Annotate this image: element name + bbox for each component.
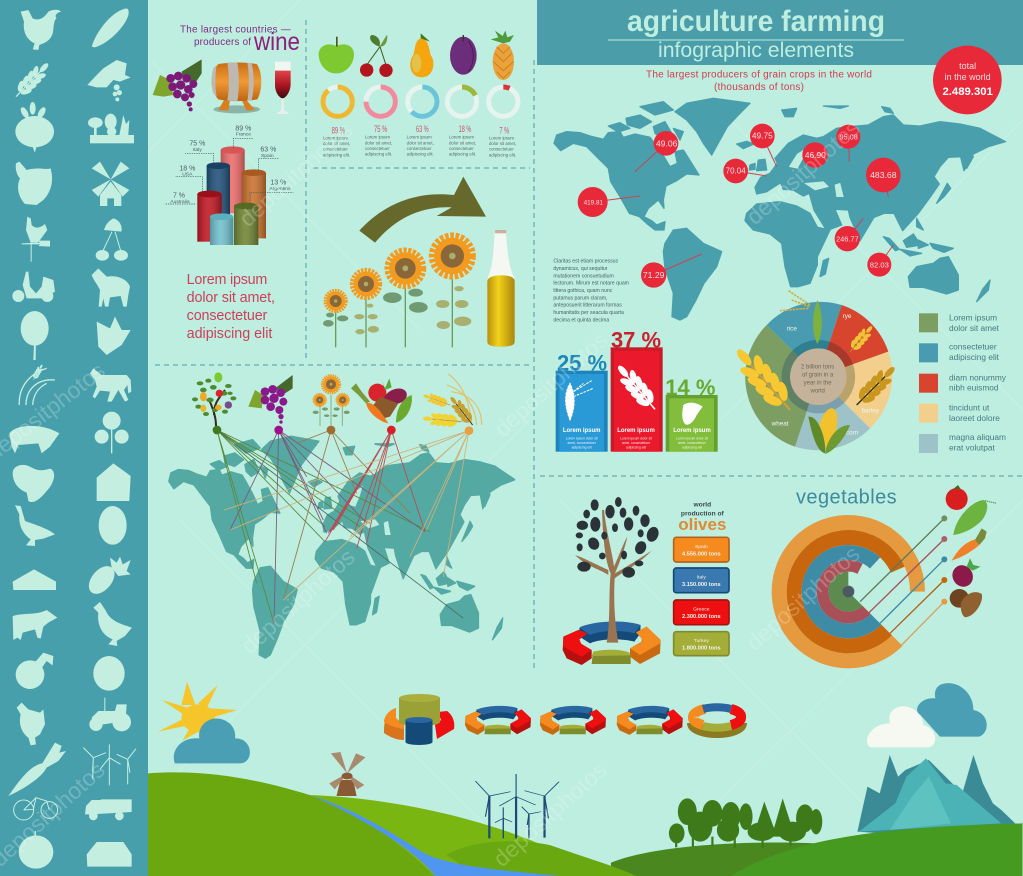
chart: wine cylinders: 75 % (189, 140, 205, 147)
text: ring captions: adipiscing elit. (449, 152, 476, 157)
icon: barrel (212, 62, 261, 113)
legend: olive producers: Greece (693, 607, 710, 613)
chart: producer bubbles: 419.81 (584, 199, 603, 206)
icon: beet (949, 558, 981, 591)
chart: producer bubbles: 95.08 (839, 132, 858, 141)
ring stage 2 (465, 706, 531, 735)
text: ring captions: Lorem ipsum (365, 135, 390, 140)
chart: percentage rings (323, 87, 518, 116)
text: claritas paragraph: dynamicus, qui sequitur (553, 266, 608, 272)
bar: 25 percent: amet, consectetuer (568, 441, 597, 445)
chart: wine cylinders: Australia (170, 199, 190, 205)
panel: wine producers (153, 24, 300, 342)
watermark: depositphotos (234, 117, 358, 232)
ring stage 3 (540, 706, 606, 735)
text: ring captions: 7 % (499, 126, 509, 136)
text: claritas paragraph: mutationem consuetudium (553, 273, 614, 279)
chart: wine cylinders: 13 % (270, 180, 286, 187)
icon: rye ear (845, 322, 877, 356)
icon: fruit tree (192, 372, 236, 426)
bar: 14 percent: amet, consectetuer (678, 441, 707, 445)
panel: world trade map (169, 372, 515, 658)
text: ring captions: dolor sit amet, (323, 141, 350, 146)
text: ring captions: adipiscing elit. (365, 152, 392, 157)
bar: 14 percent: Lorem ipsum dolor sit (676, 437, 708, 441)
bar: 37 percent: amet, consectetuer (622, 441, 651, 445)
icon: vegetable heart (351, 378, 412, 423)
legend: olive producers: Spain (695, 544, 708, 550)
chart: producer bubbles: 49.06 (656, 138, 678, 148)
donut slice labels: wheat (771, 420, 789, 427)
text: ring captions: 89 % (332, 126, 345, 136)
bar: 25 percent: Lorem ipsum dolor sit (566, 437, 598, 441)
donut slice labels (771, 313, 880, 437)
icon: tomato (946, 485, 968, 510)
heading: wine (180, 24, 300, 56)
text: lorem callout (187, 272, 275, 342)
text: ring captions: Lorem ipsum (449, 135, 474, 140)
text: claritas paragraph: lectorum. Mirum est notare quam (553, 281, 629, 287)
callout: world total: 2.489.301 (942, 86, 993, 98)
chart: wine cylinders: France (236, 132, 251, 138)
chart: exploded ring stages (384, 694, 741, 745)
text: ring captions: 18 % (459, 124, 471, 134)
chart: wine cylinders: 18 % (179, 166, 195, 173)
bar: 14 percent (665, 375, 718, 452)
legend: olive producers (674, 537, 729, 656)
text: donut center: of grain in a (802, 372, 834, 378)
panel: fruit production rings (319, 31, 518, 157)
ring stage 4 (617, 706, 683, 735)
legend: olive producers: 2.300.000 tons (682, 614, 721, 620)
map: world grain (554, 98, 1006, 320)
legend: grain donut: nibh euismod (949, 382, 999, 392)
callout: world total (933, 46, 1002, 114)
text: donut center (801, 364, 834, 394)
legend: grain donut: dolor sit amet (949, 323, 1000, 333)
bar: 37 percent (610, 327, 663, 452)
chart: producer bubbles: 71.29 (643, 270, 665, 280)
text: ring captions: adipiscing elit. (323, 152, 350, 157)
callout: world total: total (959, 61, 976, 71)
heading: vegetables: vegetables (796, 486, 897, 508)
icon: white cloud (867, 706, 935, 747)
icon: teal cloud right (917, 683, 987, 737)
chart: wine cylinders (165, 125, 293, 245)
icon: corn (808, 406, 850, 454)
heading: grain map (646, 69, 872, 93)
icon: sun (158, 682, 237, 741)
bar: 37 percent: 37 % (611, 327, 661, 352)
heading: olives: olives (678, 515, 726, 534)
text: ring captions (323, 124, 516, 157)
text: ring captions: Lorem ipsum (489, 135, 514, 140)
text: lorem callout: adipiscing elit (187, 326, 272, 342)
legend: grain donut: consectetuer (949, 341, 997, 351)
text: ring captions: consectetuer (489, 147, 514, 152)
icon: rice sprig (780, 291, 822, 344)
icon: grain sheaf (422, 374, 482, 429)
text: ring captions: consectetuer (407, 146, 432, 151)
bar: 37 percent: adipiscing elit (626, 446, 646, 450)
legend: grain donut: magna aliquam (949, 432, 1006, 442)
text: ring captions: consectetuer (449, 146, 474, 151)
bar: 14 percent: Lorem ipsum (673, 428, 711, 434)
chart: leader lines (860, 515, 947, 645)
map: trade routes map (169, 436, 515, 658)
text: ring captions: consectetuer (323, 147, 348, 152)
text: lorem callout: consectetuer (187, 308, 268, 324)
chart: wine cylinders: USA (182, 171, 193, 177)
legend: grain donut: adipiscing elit (949, 352, 1000, 362)
chart: vegetable arcs (779, 522, 917, 661)
legend: olive producers: 4.556.000 tons (682, 551, 721, 557)
chart: wine cylinders: 63 % (260, 147, 276, 154)
text: claritas paragraph: putamus parum claram, (553, 295, 608, 301)
donut slice labels: rice (787, 325, 797, 332)
heading: olives: production of (681, 510, 725, 517)
sunflower plants (323, 236, 472, 347)
icons: lower sidebar silhouettes (8, 463, 136, 869)
icon: potatoes (950, 589, 982, 617)
arrow (359, 177, 486, 243)
ring stage 1 (384, 694, 454, 745)
icon: plum (450, 35, 477, 75)
panel: olives (563, 497, 729, 665)
donut slice labels: corn (846, 430, 859, 437)
panel: icon sidebar (0, 0, 148, 876)
text: lorem callout: dolor sit amet, (187, 290, 275, 306)
text: donut center: world (810, 388, 825, 394)
subtitle: infographic elements (658, 39, 854, 62)
bar: 37 percent: Lorem ipsum (617, 428, 655, 434)
donut slice labels: rye (843, 313, 852, 320)
text: ring captions: dolor sit amet, (449, 140, 476, 145)
chart: wine cylinders: Italy (193, 147, 202, 153)
heading: olives (678, 502, 726, 534)
text: claritas paragraph: Claritas est etiam processus (553, 259, 619, 265)
chart: producer bubbles: 483.68 (870, 170, 897, 180)
legend: grain donut: diam nonummy (949, 372, 1007, 382)
chart: wine cylinders: 89 % (235, 125, 251, 132)
icons: upper sidebar silhouettes (9, 8, 134, 453)
legend: olive producers: 3.150.000 tons (682, 582, 721, 588)
icon: cherries (360, 35, 393, 77)
chart: wine cylinders: Spain (261, 153, 274, 159)
icon: cucumber (953, 500, 997, 535)
text: ring captions: adipiscing elit. (407, 152, 434, 157)
legend: grain donut: laoreet dolore (949, 413, 1000, 423)
text: claritas paragraph: decima et quinta decima (553, 317, 609, 323)
hills (148, 772, 1022, 876)
heading: grain map: The largest producers of grain crops in the world (646, 69, 872, 80)
icon: apple (319, 37, 354, 73)
text: ring captions: consectetuer (365, 146, 390, 151)
text: donut center: year in the (804, 380, 832, 386)
panel: grain bar chart (556, 327, 718, 452)
chart: wine cylinders: 7 % (173, 192, 185, 199)
watermark: depositphotos (236, 544, 360, 659)
icon: grape bunch (248, 375, 293, 424)
legend: olive producers: Turkey (694, 638, 709, 644)
icon: cloud left (174, 719, 250, 763)
bar: 25 percent: 25 % (557, 351, 607, 376)
title: agriculture farming (627, 5, 885, 38)
chart: producer bubbles: 70.04 (726, 167, 746, 176)
text: donut center: 2 billion tons (801, 364, 834, 370)
chart: producer bubbles: 49.75 (752, 131, 773, 141)
icon: wine glass (275, 62, 291, 114)
ring stage 5 (693, 707, 741, 732)
text: claritas paragraph (553, 259, 629, 323)
icon: mountains (857, 755, 1015, 837)
watermark: depositphotos (741, 115, 865, 230)
icon: three sunflowers (313, 376, 350, 426)
river (313, 796, 561, 876)
legend: olive producers: 1.800.000 tons (682, 645, 721, 651)
icon: oil bottle (487, 230, 515, 347)
chart: wine cylinders: Argentina (269, 186, 291, 192)
icon: wind turbines (475, 774, 559, 838)
icon: tree line (669, 798, 822, 848)
text: lorem callout: Lorem ipsum (187, 272, 267, 288)
watermark (0, 115, 865, 872)
text: claritas paragraph: littera gothica, quam nunc (553, 288, 613, 294)
icon: olive ring base (563, 621, 661, 665)
heading: olives: world (692, 502, 711, 509)
donut slice labels: barley (862, 408, 880, 415)
icon: windmill (329, 752, 366, 796)
text: ring captions: adipiscing elit. (489, 152, 516, 157)
heading: wine: wine (253, 29, 300, 56)
icon: grapes (153, 59, 202, 111)
watermark: depositphotos (489, 327, 613, 442)
icon: pineapple (491, 31, 514, 80)
chart: grain donut (726, 291, 901, 454)
icon: barley ear (849, 360, 901, 412)
text: ring captions: Lorem ipsum (323, 135, 348, 140)
callout: world total: in the world (945, 72, 991, 82)
legend: grain donut: tincidunt ut (949, 402, 990, 412)
chart: producer bubbles: 46.90 (805, 150, 826, 160)
watermark: depositphotos (488, 757, 612, 872)
text: ring captions: Lorem ipsum (407, 135, 432, 140)
chart: producer bubbles: 82.03 (870, 260, 889, 269)
text: claritas paragraph: anteposuerit litterarum formas (553, 303, 622, 309)
icon: pear (410, 33, 433, 77)
heading: grain map: (thousands of tons) (714, 82, 804, 93)
panel: vegetables (779, 485, 997, 661)
text: ring captions: dolor sit amet, (407, 140, 434, 145)
text: ring captions: dolor sit amet, (365, 140, 392, 145)
panel: sunflower to oil (323, 177, 515, 347)
panel: grain producers map (553, 46, 1006, 323)
panel: landscape (148, 682, 1022, 876)
heading: wine: The largest countries — (180, 24, 291, 35)
watermark: depositphotos (741, 541, 865, 656)
chart: route lines (213, 426, 473, 623)
bar: 25 percent: adipiscing elit (572, 446, 592, 450)
legend: grain donut (919, 313, 1007, 453)
legend: olive producers: Italy (697, 575, 706, 581)
bar: 14 percent: 14 % (665, 375, 715, 400)
text: ring captions: 63 % (416, 124, 429, 134)
bar: 25 percent (556, 351, 608, 452)
panel: header (537, 0, 1023, 65)
bar: 25 percent: Lorem ipsum (563, 428, 600, 434)
bar: 37 percent: Lorem ipsum dolor sit (620, 437, 652, 441)
text: ring captions: 75 % (374, 124, 387, 134)
icon: carrot (952, 528, 987, 561)
legend: grain donut: erat volutpat (949, 442, 996, 452)
icon: wheat ear (726, 340, 802, 420)
heading: wine: producers of (194, 37, 251, 48)
text: ring captions: dolor sit amet, (489, 141, 516, 146)
text: claritas paragraph: humanitatis per seacula quarta (553, 310, 624, 316)
icon: olive tree (575, 497, 661, 643)
bar: 14 percent: adipiscing elit (682, 446, 702, 450)
legend: grain donut: Lorem ipsum (949, 313, 997, 323)
chart: producer bubbles: 246.77 (836, 234, 859, 243)
chart: producer bubbles (578, 124, 901, 288)
